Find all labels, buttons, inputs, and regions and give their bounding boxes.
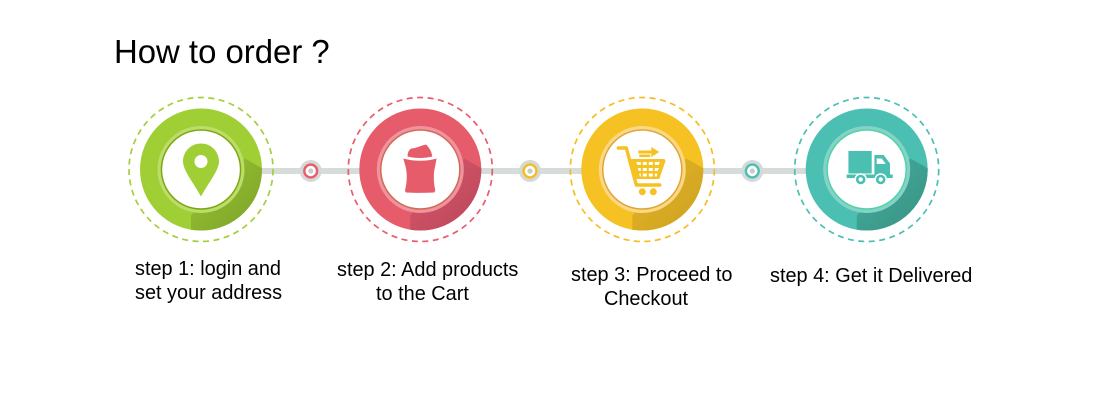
connector node 3 [741,160,763,182]
step 4 label: step 4: Get it Delivered [770,265,972,287]
step 2 label: step 2: Add products [337,259,518,281]
icon: delivery truck [847,151,893,186]
connector node 2 [519,160,541,182]
icon: shopping cart [618,147,665,195]
title: How to order ? [114,33,330,70]
icon: product sack [403,144,437,193]
connector line [255,168,815,174]
step 3 label: Checkout [604,288,689,310]
step 2 label: to the Cart [376,283,469,305]
step 1 badge [129,98,273,242]
step 3 badge [570,98,714,242]
step 4 badge [795,98,939,242]
step 1 label: step 1: login and [135,258,281,280]
connector node 1 [300,160,322,182]
step 1 label: set your address [135,282,282,304]
step 2 badge [348,98,492,242]
icon: map pin [183,144,219,196]
step 3 label: step 3: Proceed to [571,264,732,286]
